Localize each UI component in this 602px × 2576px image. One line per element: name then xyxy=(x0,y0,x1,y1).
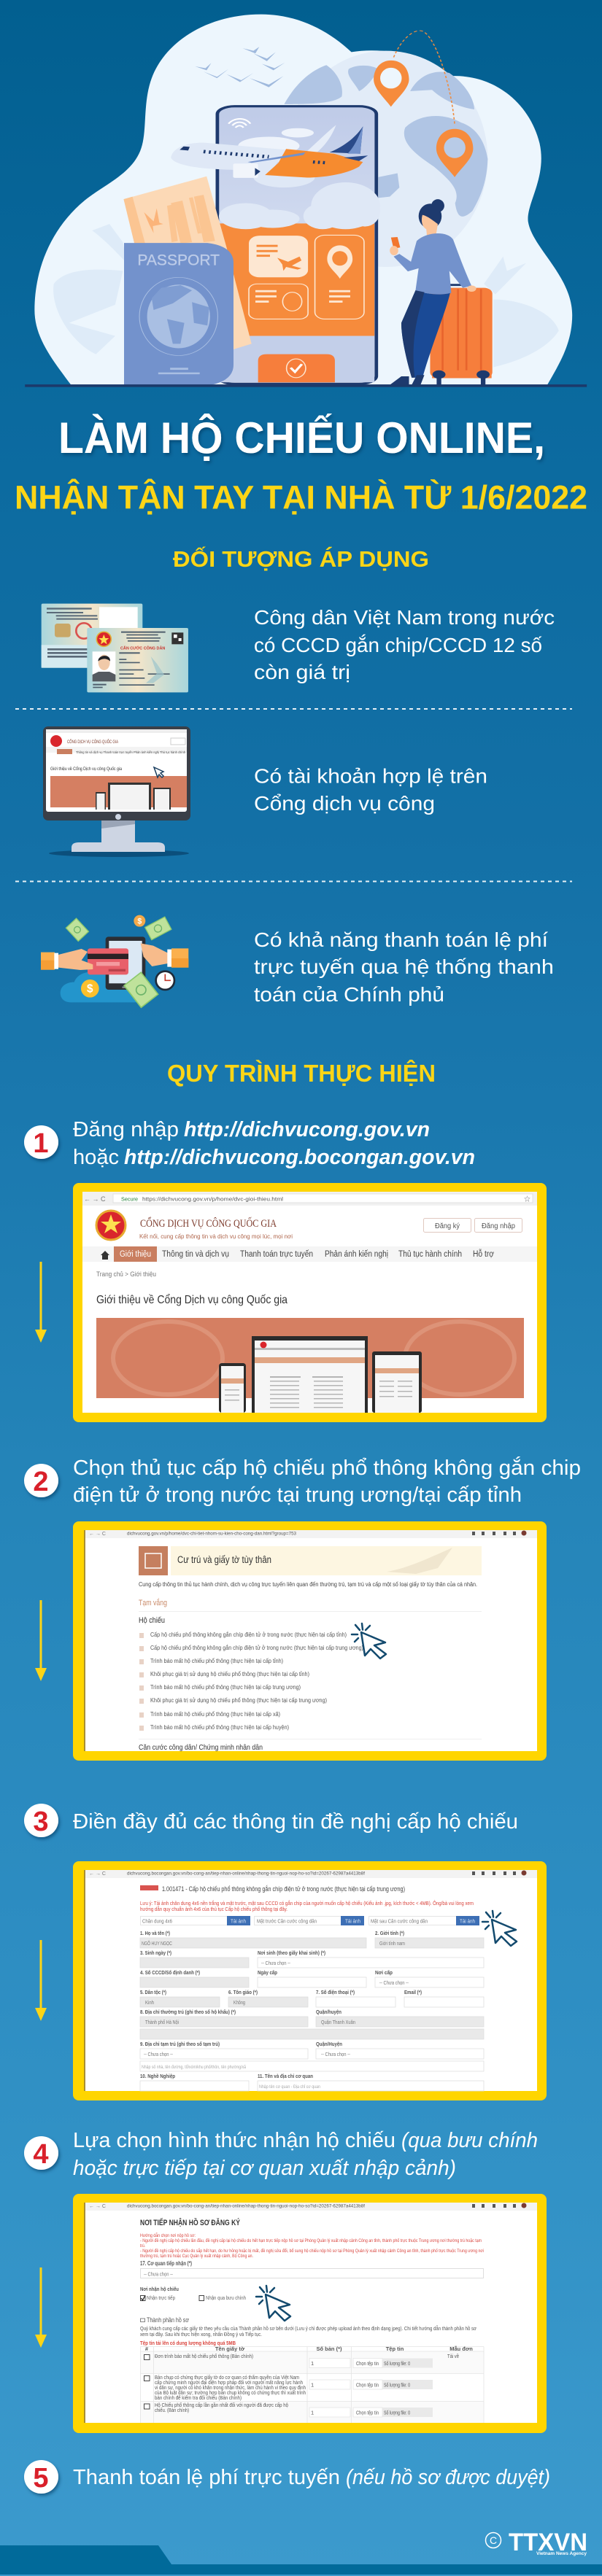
smartphone xyxy=(217,106,380,384)
passport receipt options xyxy=(140,2286,246,2301)
photo upload fields xyxy=(140,1916,479,1925)
accordion: passport list: Khôi phục giá trị sử dụng hộ chiếu phổ thông (thực hiện tại cấp tỉnh) xyxy=(150,1671,309,1677)
icon: desktop monitor with portal page: Thông tin và dịch vụ Thanh toán trực tuyến Phản ánh kiến nghị Thủ tục hành chính xyxy=(76,750,185,754)
form field labels: Nơi cấp xyxy=(375,1969,393,1976)
browser bar: https://dichvucong.gov.vn/p/home/dvc-gioi-thieu.html xyxy=(142,1196,283,1202)
documents table: Số bản (*) xyxy=(317,2346,342,2352)
form input values: -- Chưa chọn -- xyxy=(321,2051,350,2057)
form input values: Nhập số nhà, tên đường, tổ/xóm/khu phố/thôn, tên phường/xã xyxy=(142,2065,247,2070)
step 2 number badge xyxy=(24,1464,58,1497)
accordion: passport list: Trình báo mất hộ chiếu phổ thông (thực hiện tại cấp trung ương) xyxy=(150,1684,301,1691)
form inputs xyxy=(140,1938,484,2091)
step 5 number badge xyxy=(24,2460,58,2494)
accordion: passport list: Trình báo mất hộ chiếu phổ thông (thực hiện tại cấp huyện) xyxy=(150,1724,289,1731)
step 4 number badge: 4 xyxy=(33,2139,49,2170)
browser bar xyxy=(85,1870,537,1878)
navigation bar: Thông tin và dịch vụ xyxy=(162,1250,229,1259)
accordion: passport list: Trình báo mất hộ chiếu phổ thông (thực hiện tại cấp xã) xyxy=(150,1711,280,1718)
browser bar: dichvucong.bocongan.gov.vn/bo-cong-an/tiep-nhan-online/nhap-thong-tin-nguoi-nop-ho-so?id=20267-62987a4413b8f xyxy=(127,1871,365,1876)
browser bar xyxy=(85,2203,537,2211)
step 3 number badge: 3 xyxy=(33,1807,49,1837)
category tile and header: Cư trú và giấy tờ tùy thân xyxy=(177,1554,271,1565)
documents table: 1 xyxy=(311,2360,314,2367)
text: condition three xyxy=(254,928,554,1006)
text: condition three: toán của Chính phủ xyxy=(254,983,444,1006)
documents table: # xyxy=(145,2346,149,2352)
icon: online payment: $ xyxy=(137,917,142,926)
form input values: Nhập tên cơ quan - Địa chỉ cơ quan xyxy=(259,2084,320,2090)
copyright logo: TTXVN: C xyxy=(490,2534,497,2546)
browser bar xyxy=(82,1192,537,1206)
cursor icon xyxy=(482,1911,517,1946)
text: condition one: Công dân Việt Nam trong nước xyxy=(254,606,555,629)
accordion: passport list xyxy=(139,1616,363,1731)
navigation bar: Phản ánh kiến nghị xyxy=(325,1250,388,1259)
documents table: Chọn tệp tin xyxy=(356,2382,379,2388)
form field labels: 10. Nghề Nghiệp xyxy=(140,2073,175,2079)
accordion: passport list: Cấp hộ chiếu phổ thông không gắn chíp điện tử ở trong nước (thực hiện tại cấp trung ương) xyxy=(150,1645,363,1651)
form field labels: Nơi sinh (theo giấy khai sinh) (*) xyxy=(258,1950,325,1956)
passport receipt options: Nhận qua bưu chính xyxy=(206,2294,246,2301)
suitcase xyxy=(430,284,493,385)
location card xyxy=(315,235,364,319)
heading: procedure: QUY TRÌNH THỰC HIỆN xyxy=(167,1060,436,1087)
documents table: Chọn tệp tin xyxy=(356,2410,379,2416)
accordion: passport list: Hộ chiếu xyxy=(139,1616,165,1625)
documents table: của Bộ luật dân sự; trường hợp bản chụp không có chứng thực thì xuất trình xyxy=(155,2389,306,2396)
icon: desktop monitor with portal page: CỔNG DỊCH VỤ CÔNG QUỐC GIA xyxy=(67,737,118,745)
form field labels: Quận/Huyện xyxy=(316,2041,342,2047)
documents table: Số lượng file: 0 xyxy=(384,2382,410,2388)
form field labels: Quận/huyện xyxy=(316,2009,341,2015)
step 5 text xyxy=(73,2466,550,2489)
documents table: 1 xyxy=(311,2382,314,2388)
documents table: Đơn trình báo mất hộ chiếu phổ thông (Bản chính) xyxy=(155,2353,253,2359)
icon: desktop monitor with portal page: Giới thiệu về Cổng Dịch vụ công Quốc gia xyxy=(50,767,123,772)
form field labels: 2. Giới tính (*) xyxy=(375,1930,404,1936)
passport receipt options: Nhận trực tiếp xyxy=(147,2294,175,2301)
cursor icon xyxy=(256,2286,290,2321)
documents table: Tệp tin xyxy=(386,2346,404,2352)
dossier components intro: Quý khách cung cấp các giấy tờ theo yêu cầu của Thành phần hồ sơ bên dưới (Lưu ý chỉ được phép upload ảnh theo định dạng jpeg). Chi tiết hướng dẫn thành phần hồ sơ xyxy=(140,2325,476,2332)
red instructions: - Người đề nghị cấp hộ chiếu do sắp hết hạn, do hư hỏng hoặc bị mất, đề nghị sửa đổi, bổ sung hộ chiếu nộp hồ sơ tại Phòng Quản lý xuất nhập cảnh Công an tỉnh, thành phố trực thuộc Trung ương nơi xyxy=(140,2249,484,2254)
step 4 text xyxy=(73,2129,538,2180)
step 1 screenshot panel xyxy=(73,1183,547,1422)
documents table: 1 xyxy=(311,2410,314,2416)
dossier components intro: Thành phần hồ sơ xyxy=(147,2316,189,2324)
red note: Lưu ý: Tải ảnh chân dung 4x6 nền trắng và mặt trước, mặt sau CCCD có gắn chip của người muốn cấp hộ chiếu (Kiểu ảnh .jpg, kích thước < 4MB). Ông/bà vui lòng xem xyxy=(140,1900,474,1906)
step 4 number badge xyxy=(24,2136,58,2170)
accordion: temporary absence: Tạm vắng xyxy=(139,1598,167,1607)
browser bar: ← → C xyxy=(84,1195,106,1203)
documents table: Tải về xyxy=(447,2353,459,2359)
icon: online payment xyxy=(41,915,188,1007)
form input values: Không xyxy=(234,1999,245,2006)
red instructions: thường trú, tạm trú hoặc Cục Quản lý xuất nhập cảnh, Bộ Công an. xyxy=(140,2254,253,2259)
text: condition two: Có tài khoản hợp lệ trên xyxy=(254,764,487,788)
form field labels xyxy=(140,1930,422,2079)
photo upload fields: Tải ảnh xyxy=(231,1918,246,1924)
form field labels: 11. Tên và địa chỉ cơ quan xyxy=(258,2073,313,2079)
step 2 text xyxy=(73,1456,581,1507)
red instructions xyxy=(140,2233,484,2259)
heading: applicable subjects: ĐỐI TƯỢNG ÁP DỤNG xyxy=(173,546,429,572)
form field labels: 9. Địa chỉ tạm trú (ghi theo sổ tạm trú) xyxy=(140,2041,220,2047)
text: condition one: có CCCD gắn chip/CCCD 12 số xyxy=(254,634,542,656)
red instructions: - Người đề nghị cấp hộ chiếu lần đầu, đề nghị cấp lại hộ chiếu do hết hạn trực tiếp nộp hồ sơ tại Phòng Quản lý xuất nhập cảnh Công an tỉnh, thành phố trực thuộc Trung ương nơi thường trú hoặc tạm xyxy=(140,2238,482,2243)
orange banner with devices xyxy=(96,1318,524,1413)
form field labels: 1. Họ và tên (*) xyxy=(140,1930,170,1936)
step 4 screenshot panel xyxy=(73,2194,547,2433)
leaves xyxy=(53,224,559,368)
map pin two xyxy=(436,129,473,177)
form field labels: 6. Tôn giáo (*) xyxy=(228,1989,258,1995)
login buttons: Đăng ký xyxy=(435,1222,460,1230)
form field labels: Email (*) xyxy=(404,1989,422,1995)
dossier components intro: Tệp tin tải lên có dung lượng không quá 5MB xyxy=(140,2340,236,2346)
globe xyxy=(284,51,487,267)
step 4 arrow xyxy=(35,2267,47,2348)
photo upload fields: Mặt sau Căn cước công dân xyxy=(371,1918,428,1924)
step 1 text: hoặc xyxy=(73,1146,119,1169)
clouds xyxy=(219,128,380,229)
photo upload fields: Tải ảnh xyxy=(345,1918,360,1924)
step 5 text: Thanh toán lệ phí trực tuyến xyxy=(73,2466,340,2489)
documents table: cấp chứng minh người đại diện hợp pháp đối với người mất năng lực hành xyxy=(155,2379,303,2386)
main title line one: LÀM HỘ CHIẾU ONLINE, xyxy=(58,414,545,462)
form title: 1.001471 - Cấp hộ chiếu phổ thông không gắn chíp điện tử ở trong nước (thực hiện tại cấp trung ương) xyxy=(162,1885,405,1893)
step 2 text: Chọn thủ tục cấp hộ chiếu phổ thông không gắn chip xyxy=(73,1456,581,1480)
form input values: -- Chưa chọn -- xyxy=(379,1979,409,1986)
map pin one xyxy=(374,61,409,106)
step 1 text: http://dichvucong.bocongan.gov.vn xyxy=(124,1146,475,1169)
footer band xyxy=(0,2545,602,2575)
step 2 screenshot panel xyxy=(73,1521,547,1761)
text: condition three: trực tuyến qua hệ thống thanh xyxy=(254,955,554,978)
documents table: Số lượng file: 0 xyxy=(384,2410,410,2416)
photo upload fields: Chân dung 4x6 xyxy=(142,1918,172,1924)
main title line two: NHẬN TẬN TAY TẠI NHÀ TỪ 1/6/2022 xyxy=(15,478,587,516)
text: condition one: còn giá trị xyxy=(254,661,350,683)
step 5 number badge: 5 xyxy=(33,2463,49,2494)
text: condition three: Có khả năng thanh toán lệ phí xyxy=(254,928,548,951)
background blob xyxy=(34,15,572,385)
browser bar: dichvucong.bocongan.gov.vn/bo-cong-an/tiep-nhan-online/nhap-thong-tin-nguoi-nop-ho-so?id=20267-62987a4413b8f xyxy=(127,2204,365,2208)
icon: citizen id cards xyxy=(42,604,188,692)
icon: citizen id cards: CĂN CƯỚC CÔNG DÂN xyxy=(120,645,165,651)
step 5 text: (nếu hồ sơ được duyệt) xyxy=(346,2466,550,2489)
national emblem xyxy=(96,1211,126,1240)
portal logo text: CỔNG DỊCH VỤ CÔNG QUỐC GIA xyxy=(140,1217,277,1230)
accordion: passport list: Trình báo mất hộ chiếu phổ thông (thực hiện tại cấp tỉnh) xyxy=(150,1658,283,1664)
red note: hướng dẫn quy chuẩn ảnh 4x6 của thủ tục Cấp hộ chiếu phổ thông tại đây. xyxy=(140,1906,288,1912)
step 1 arrow xyxy=(35,1262,47,1343)
form input values: Thành phố Hà Nội xyxy=(145,2019,179,2025)
navigation bar: Hỗ trợ xyxy=(473,1249,494,1259)
login buttons: Đăng nhập xyxy=(482,1222,515,1230)
globe continents xyxy=(284,65,487,217)
documents table: bản chính để kiểm tra đối chiếu (Bản chính) xyxy=(155,2394,242,2401)
receiving agency select: 17. Cơ quan tiếp nhận (*) xyxy=(140,2260,192,2267)
wifi icon xyxy=(228,119,250,128)
browser bar: ← → C xyxy=(89,1871,106,1877)
form input values: -- Chưa chọn -- xyxy=(261,1960,290,1966)
cursor icon xyxy=(352,1623,386,1659)
step 4 text: Lựa chọn hình thức nhận hộ chiếu xyxy=(73,2129,395,2152)
browser bar: dichvucong.gov.vn/p/home/dvc-chi-tiet-nhom-su-kien-cho-cong-dan.html?group=753 xyxy=(127,1532,296,1536)
browser bar: Secure xyxy=(121,1196,138,1202)
ticket card xyxy=(249,236,308,277)
browser bar: ← → C xyxy=(89,1532,106,1537)
navigation bar xyxy=(82,1246,537,1262)
passport: PASSPORT xyxy=(137,251,220,268)
form field labels: 3. Sinh ngày (*) xyxy=(140,1950,171,1956)
documents table: Tên giấy tờ xyxy=(215,2346,245,2352)
red instructions: Hướng dẫn chọn nơi nộp hồ sơ: xyxy=(140,2233,196,2238)
copyright logo: TTXVN: Vietnam News Agency xyxy=(536,2551,587,2556)
form input values: Kinh xyxy=(145,1999,154,2006)
step 3 text: Điền đầy đủ các thông tin đề nghị cấp hộ chiếu xyxy=(73,1810,518,1834)
birds xyxy=(195,47,285,88)
icon: desktop monitor with portal page xyxy=(43,726,190,857)
form input values xyxy=(142,1940,409,2090)
form input values: Giới tính nam xyxy=(379,1940,405,1947)
dashed flight path xyxy=(393,31,455,125)
red note xyxy=(140,1900,474,1912)
copyright logo: TTXVN: TTXVN xyxy=(509,2529,587,2556)
accordion: passport list: Khôi phục giá trị sử dụng hộ chiếu phổ thông (thực hiện tại cấp trung ương) xyxy=(150,1697,327,1704)
category description: Cung cấp thông tin thủ tục hành chính, dịch vụ công trực tuyến liên quan đến thường trú, tạm trú và cấp một số loại giấy tờ tùy thân của cá nhân. xyxy=(139,1581,477,1588)
form input values: NGÔ HUY NGỌC xyxy=(142,1940,172,1947)
step 2 text: điện tử ở trong nước tại trung ương/tại cấp tỉnh xyxy=(73,1483,522,1507)
step 3 screenshot panel xyxy=(73,1861,547,2100)
form field labels: 8. Địa chỉ thường trú (ghi theo sổ hộ khẩu) (*) xyxy=(140,2009,236,2015)
browser bar: ☆ xyxy=(524,1195,530,1203)
passport xyxy=(124,243,234,385)
form field labels: Ngày cấp xyxy=(258,1969,277,1976)
receiving agency select: -- Chưa chọn -- xyxy=(144,2271,173,2277)
text: condition two xyxy=(254,764,487,815)
hero illustration: passport, phone, traveller xyxy=(25,15,587,387)
form field labels: 5. Dân tộc (*) xyxy=(140,1989,166,1995)
form field labels: 4. Số CCCD/Số định danh (*) xyxy=(140,1969,200,1976)
photo upload fields: Mặt trước Căn cước công dân xyxy=(257,1918,317,1924)
documents table: vi dân sự, người có khó khăn trong nhận thức, làm chủ hành vi theo quy định xyxy=(155,2384,306,2391)
step 2 number badge: 2 xyxy=(33,1467,49,1497)
navigation bar: Giới thiệu xyxy=(120,1250,151,1259)
dossier components intro: xem tại đây. Sau khi thực hiện xong, nhấn Đồng ý và Tiếp tục. xyxy=(140,2331,262,2338)
step 1 text: http://dichvucong.gov.vn xyxy=(184,1118,430,1141)
passport receipt options: Nơi nhận hộ chiếu xyxy=(140,2286,179,2292)
documents table: Hộ Chiếu phổ thông cấp lần gần nhất đối với người đã được cấp hộ xyxy=(155,2402,288,2408)
documents table: Chọn tệp tin xyxy=(356,2360,379,2367)
documents table: Bản chụp có chứng thực giấy tờ do cơ quan có thẩm quyền của Việt Nam xyxy=(155,2374,299,2381)
boarding ticket xyxy=(123,176,252,350)
ground line xyxy=(25,384,587,387)
accordion: citizen id: Căn cước công dân/ Chứng minh nhân dân xyxy=(139,1743,263,1752)
step 1 number badge: 1 xyxy=(33,1128,49,1159)
page heading: Giới thiệu về Cổng Dịch vụ công Quốc gia xyxy=(96,1293,288,1306)
login buttons xyxy=(423,1218,522,1233)
confirm button xyxy=(258,354,335,382)
form input values: -- Chưa chọn -- xyxy=(144,2051,173,2057)
documents table xyxy=(140,2346,484,2423)
accordion: passport list: Cấp hộ chiếu phổ thông không gắn chíp điện tử ở trong nước (thực hiện tại cấp tỉnh) xyxy=(150,1632,347,1638)
breadcrumb: Trang chủ > Giới thiệu xyxy=(96,1270,156,1279)
step 1 text xyxy=(73,1118,475,1169)
section heading: NƠI TIẾP NHẬN HỒ SƠ ĐĂNG KÝ xyxy=(140,2218,241,2227)
form input values: Quận Thanh Xuân xyxy=(321,2019,355,2025)
step 4 text: (qua bưu chính xyxy=(401,2129,538,2152)
traveller xyxy=(390,199,476,385)
category tile and header xyxy=(139,1546,482,1575)
browser bar: ← → C xyxy=(89,2204,106,2209)
documents table: chiếu. (Bản chính) xyxy=(155,2407,189,2413)
browser bar xyxy=(85,1530,537,1538)
step 2 arrow xyxy=(35,1600,47,1681)
step 3 arrow xyxy=(35,1940,47,2021)
form field labels: 7. Số điện thoại (*) xyxy=(316,1989,355,1995)
documents table: Mẫu đơn xyxy=(449,2346,473,2352)
red instructions: trú. xyxy=(140,2244,145,2249)
time card xyxy=(249,284,308,319)
dossier components intro xyxy=(140,2316,476,2346)
airplane xyxy=(171,125,368,178)
step 4 text: hoặc trực tiếp tại cơ quan xuất nhập cảnh) xyxy=(73,2157,456,2180)
text: condition one xyxy=(254,606,555,683)
photo upload fields: Tải ảnh xyxy=(460,1918,475,1924)
step 1 text: Đăng nhập xyxy=(73,1118,179,1141)
icon: online payment: $ xyxy=(87,983,93,996)
receiving agency select xyxy=(140,2260,483,2278)
step 1 number badge xyxy=(24,1125,58,1159)
text: condition two: Cổng dịch vụ công xyxy=(254,792,435,815)
portal subtitle: Kết nối, cung cấp thông tin và dịch vụ công mọi lúc, mọi nơi xyxy=(139,1233,293,1240)
navigation bar: Thanh toán trực tuyến xyxy=(240,1250,313,1259)
navigation bar: Thủ tục hành chính xyxy=(398,1250,462,1259)
documents table: Số lượng file: 0 xyxy=(384,2360,410,2367)
step 3 number badge xyxy=(24,1804,58,1837)
